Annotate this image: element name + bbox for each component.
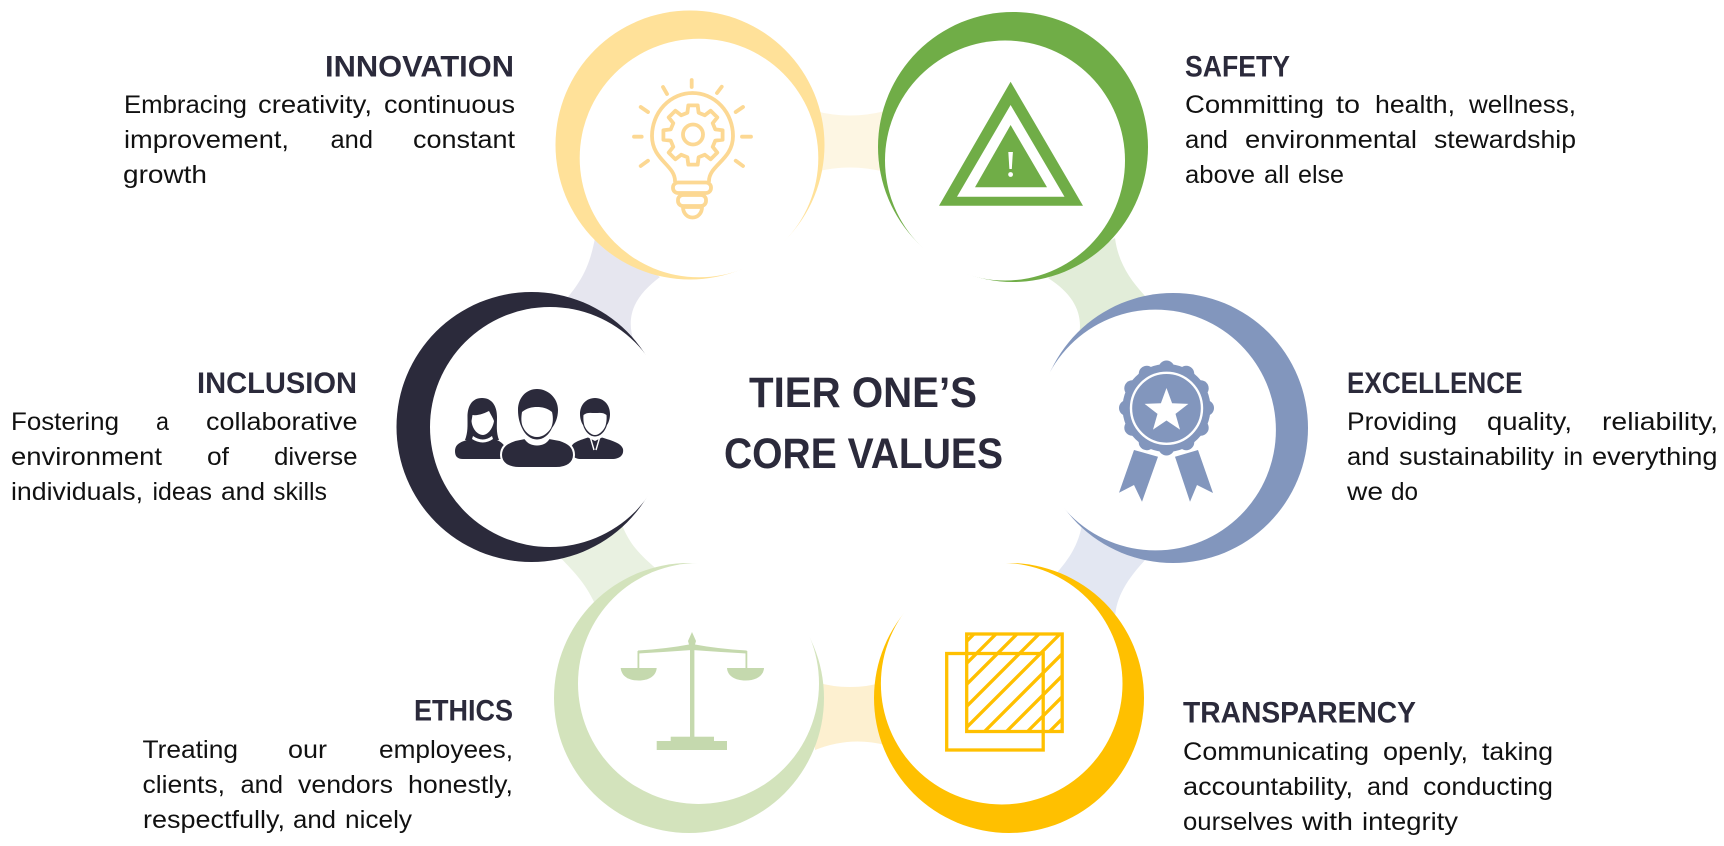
text block: safety xyxy=(1185,50,1576,189)
description: excellence: reliability, xyxy=(1602,408,1718,436)
icon: warning triangle xyxy=(939,82,1083,206)
heading: transparency: TRANSPARENCY xyxy=(1183,696,1416,730)
description: excellence xyxy=(1346,408,1718,506)
text block: inclusion xyxy=(11,367,358,506)
description: safety: all xyxy=(1264,161,1290,189)
description: safety: health, xyxy=(1375,91,1455,119)
description: safety: and xyxy=(1185,126,1228,154)
description: transparency: openly, xyxy=(1383,738,1468,766)
text block: transparency xyxy=(1183,696,1553,836)
ring: ethics xyxy=(554,563,824,833)
description: innovation: improvement, xyxy=(124,126,289,154)
description: ethics: honestly, xyxy=(408,771,513,799)
description: innovation: and xyxy=(330,126,373,154)
description: ethics: respectfully, xyxy=(143,806,285,834)
description: excellence: and xyxy=(1347,443,1390,471)
description: transparency: accountability, xyxy=(1183,773,1353,801)
description: transparency: integrity xyxy=(1362,808,1459,836)
heading: ethics: ETHICS xyxy=(414,694,513,728)
icon: overlapping hatched squares xyxy=(945,632,1064,752)
description: transparency: taking xyxy=(1482,738,1553,766)
description: safety xyxy=(1185,91,1576,189)
connector: safety to excellence xyxy=(1048,238,1146,335)
connector: ethics to transparency xyxy=(815,682,885,750)
description: excellence: quality, xyxy=(1487,408,1572,436)
description: inclusion: ideas xyxy=(152,478,212,506)
connector: excellence to transparency xyxy=(1055,525,1150,620)
man centre xyxy=(501,389,574,468)
description: transparency: ourselves xyxy=(1183,808,1293,836)
ring: innovation xyxy=(556,10,824,280)
description: transparency: Communicating xyxy=(1183,738,1369,766)
description: inclusion: collaborative xyxy=(206,408,358,436)
description: ethics: Treating xyxy=(142,736,238,764)
description: ethics: vendors xyxy=(298,771,393,799)
man right xyxy=(571,398,623,459)
heading: innovation: INNOVATION xyxy=(325,50,514,84)
ring: inclusion xyxy=(396,292,670,562)
description: ethics: and xyxy=(240,771,283,799)
description: ethics: and xyxy=(293,806,336,834)
text block: innovation xyxy=(123,50,515,189)
description: excellence: do xyxy=(1391,478,1418,506)
description: excellence: in xyxy=(1564,443,1583,471)
description: ethics: nicely xyxy=(345,806,413,834)
description: inclusion: individuals, xyxy=(11,478,143,506)
description: ethics: clients, xyxy=(142,771,225,799)
description: safety: else xyxy=(1298,161,1344,189)
description: inclusion: Fostering xyxy=(11,408,119,436)
description: ethics: employees, xyxy=(379,736,513,764)
ring: safety xyxy=(878,12,1148,282)
description: excellence: sustainability xyxy=(1399,443,1555,471)
description: inclusion: of xyxy=(207,443,229,471)
description: ethics: our xyxy=(288,736,327,764)
description: innovation: constant xyxy=(413,126,515,154)
description: inclusion: environment xyxy=(11,443,162,471)
description: innovation: continuous xyxy=(384,91,515,119)
text block: excellence xyxy=(1346,367,1718,506)
center title xyxy=(724,369,1003,478)
description: excellence: Providing xyxy=(1347,408,1457,436)
icon: three people xyxy=(455,389,623,468)
description: innovation: growth xyxy=(123,161,207,189)
description: safety: wellness, xyxy=(1468,91,1576,119)
heading: safety: SAFETY xyxy=(1185,50,1290,84)
description: inclusion: diverse xyxy=(274,443,358,471)
description: ethics xyxy=(142,736,513,834)
description: safety: environmental xyxy=(1245,126,1417,154)
description: safety: to xyxy=(1336,91,1360,119)
icon: balance scale xyxy=(621,632,764,750)
description: excellence: we xyxy=(1346,478,1383,506)
connector: inclusion to ethics xyxy=(558,525,660,604)
connector: innovation to safety xyxy=(815,111,885,172)
description: safety: stewardship xyxy=(1434,126,1576,154)
description: inclusion: skills xyxy=(273,478,327,506)
connector: innovation to inclusion xyxy=(568,238,660,342)
center title: TIER ONE’S xyxy=(749,369,977,417)
description: transparency: conducting xyxy=(1423,773,1553,801)
heading: inclusion: INCLUSION xyxy=(197,367,357,400)
description: transparency: with xyxy=(1301,808,1353,836)
description: inclusion: and xyxy=(221,478,265,506)
description: transparency xyxy=(1183,738,1553,836)
description: inclusion: a xyxy=(156,408,169,436)
text block: ethics xyxy=(142,694,513,834)
ring: transparency xyxy=(874,563,1144,833)
description: innovation xyxy=(123,91,515,189)
description: safety: Committing xyxy=(1185,91,1324,119)
description: transparency: and xyxy=(1367,773,1409,801)
icon: award ribbon xyxy=(1119,360,1214,502)
woman xyxy=(455,398,505,459)
ring: excellence xyxy=(1035,293,1308,563)
center title: CORE VALUES xyxy=(724,430,1003,478)
description: excellence: everything xyxy=(1592,443,1718,471)
description: inclusion xyxy=(11,408,358,506)
description: innovation: creativity, xyxy=(258,91,372,119)
description: safety: above xyxy=(1185,161,1255,189)
heading: excellence: EXCELLENCE xyxy=(1347,367,1522,400)
description: innovation: Embracing xyxy=(124,91,247,119)
icon: light bulb with gear xyxy=(634,80,751,218)
